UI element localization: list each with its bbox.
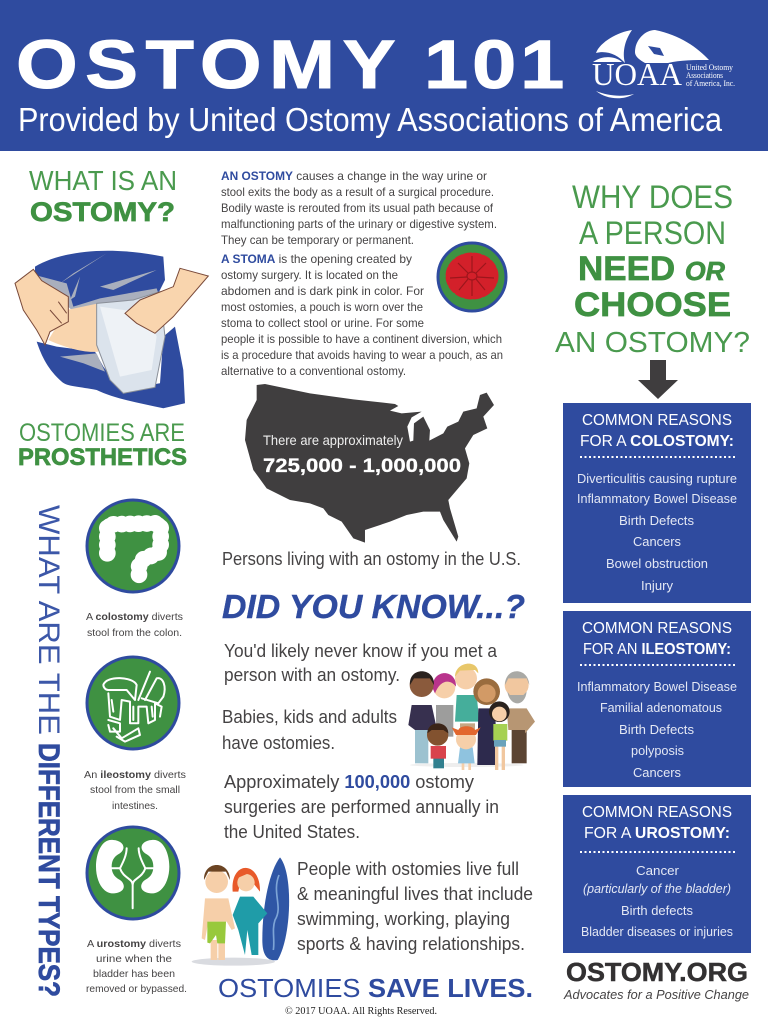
- text block: an ostomy: AN OSTOMY causes a change in the way urine or: [221, 169, 487, 183]
- title: OSTOMY: [16, 26, 395, 103]
- fact: never know: You'd likely never know if you met a: [224, 641, 498, 661]
- logo: UOAA: Associations: [686, 71, 723, 80]
- fact: 100,000 surgeries: [224, 772, 499, 842]
- heading: what is an ostomy: OSTOMY?: [30, 197, 175, 227]
- logo: UOAA: [592, 30, 735, 98]
- panel list: polyposis: [631, 743, 684, 758]
- panel heading: FOR A UROSTOMY:: [584, 825, 730, 842]
- panel list: Bladder diseases or injuries: [581, 924, 733, 939]
- text block: a stoma: ostomy surgery. It is located on the: [221, 268, 398, 282]
- caption: colostomy: [86, 611, 183, 639]
- text block: an ostomy: They can be temporary or permanent.: [221, 233, 414, 247]
- blond man: [455, 664, 479, 733]
- panel list: Birth defects: [621, 903, 693, 918]
- fact: babies kids adults: have ostomies.: [222, 733, 335, 753]
- map text: [263, 432, 461, 477]
- fact: full meaningful lives: People with ostomies live full: [297, 859, 519, 879]
- caption: urostomy: A urostomy diverts: [87, 938, 181, 950]
- panel heading: [580, 412, 734, 450]
- fact: never know: [224, 641, 498, 685]
- panel: ileostomy reasons: [563, 611, 751, 787]
- heading: why does a person need or choose an ostomy: A PERSON: [579, 215, 726, 251]
- fact: 100,000 surgeries: Approximately 100,000 ostomy: [224, 772, 474, 792]
- text block: a stoma: alternative to a conventional ostomy.: [221, 364, 406, 378]
- fact: 100,000 surgeries: the United States.: [224, 822, 360, 842]
- fact: full meaningful lives: [297, 859, 533, 954]
- icon: kidneys: [87, 827, 179, 919]
- subtitle: Provided by United Ostomy Associations of America: [18, 101, 723, 138]
- caption: colostomy: A colostomy diverts: [86, 611, 183, 623]
- icon: stoma: [438, 243, 506, 311]
- woman in hijab: [473, 678, 500, 765]
- heading: did you know: DID YOU KNOW...?: [222, 588, 525, 625]
- panel list: Inflammatory Bowel Disease: [577, 679, 737, 694]
- heading: what is an ostomy: [29, 165, 177, 227]
- arrow: [638, 360, 678, 399]
- man: [202, 865, 235, 960]
- panel: colostomy reasons: [563, 403, 751, 603]
- header banner: [0, 0, 768, 151]
- fact: babies kids adults: [222, 707, 397, 753]
- vertical heading: what are the different types: [32, 505, 65, 997]
- fact: full meaningful lives: sports & having relationships.: [297, 934, 525, 954]
- map: United States: [245, 384, 494, 543]
- panel heading: FOR A COLOSTOMY:: [580, 433, 734, 450]
- fact: full meaningful lives: swimming, working, playing: [297, 909, 510, 929]
- panel list: Cancers: [633, 765, 681, 780]
- illustration: diverse family group: [408, 664, 535, 770]
- girl: [489, 701, 510, 770]
- illustration: couple with surfboard: [192, 857, 289, 966]
- panel list: Diverticulitis causing rupture: [577, 471, 737, 486]
- fact: 100,000 surgeries: surgeries are performed annually in: [224, 797, 499, 817]
- caption: ileostomy: intestines.: [112, 800, 158, 812]
- text block: a stoma: is a procedure that avoids having to wear a pouch, as an: [221, 348, 503, 362]
- panel list: (particularly of the bladder): [583, 881, 731, 896]
- panel list: [577, 679, 737, 780]
- panel heading: [582, 804, 732, 842]
- caption: colostomy: stool from the colon.: [87, 627, 182, 639]
- old man: [505, 671, 535, 763]
- icon: small intestine: [87, 657, 179, 749]
- text block: an ostomy: [221, 169, 497, 247]
- panel list: Birth Defects: [619, 722, 694, 737]
- caption: ileostomy: An ileostomy diverts: [84, 769, 186, 781]
- text block: a stoma: stoma to collect stool or urine. For some: [221, 316, 424, 330]
- tagline: ostomies save lives: OSTOMIES SAVE LIVES.: [218, 973, 533, 1003]
- text block: a stoma: abdomen and is dark pink in color. For: [221, 284, 424, 298]
- caption: urostomy: urine when the: [96, 953, 172, 965]
- logo: UOAA: of America, Inc.: [686, 79, 735, 88]
- panel list: [581, 863, 733, 939]
- brand: ostomy.org: OSTOMY.ORG: [566, 957, 748, 987]
- caption: urostomy: removed or bypassed.: [86, 983, 187, 995]
- title: 101: [424, 26, 564, 103]
- panel heading: COMMON REASONS: [582, 412, 732, 429]
- panel list: Bowel obstruction: [606, 556, 708, 571]
- brand: ostomy.org: Advocates for a Positive Change: [563, 987, 749, 1002]
- logo: UOAA: United Ostomy: [686, 63, 733, 72]
- text block: a stoma: most ostomies, a pouch is worn over the: [221, 300, 423, 314]
- text block: a stoma: [221, 252, 503, 378]
- panel heading: [582, 620, 732, 658]
- map text: There are approximately: [263, 432, 403, 448]
- text block: a stoma: people it is possible to have a continent diversion, which: [221, 332, 502, 346]
- red haired girl: [452, 726, 481, 770]
- logo: UOAA: UOAA: [592, 56, 682, 92]
- icon: colon: [87, 500, 179, 592]
- panel list: Familial adenomatous: [600, 700, 722, 715]
- vertical heading: what are the different types: WHAT ARE THE: [32, 505, 65, 735]
- fact: never know: person with an ostomy.: [224, 665, 400, 685]
- brand: ostomy.org: [563, 957, 749, 1002]
- pink hair woman: [433, 673, 456, 737]
- map text: 725,000 - 1,000,000: [263, 456, 461, 477]
- fact: babies kids adults: Babies, kids and adults: [222, 707, 397, 727]
- panel heading: COMMON REASONS: [582, 804, 732, 821]
- caption: ileostomy: [84, 769, 186, 812]
- heading: ostomies are prosthetics: OSTOMIES ARE: [19, 419, 185, 447]
- panel list: Injury: [641, 578, 673, 593]
- text block: an ostomy: Bodily waste is rerouted from its usual path because of: [221, 201, 494, 215]
- woman: [232, 868, 267, 955]
- text block: an ostomy: malfunctioning parts of the urinary or digestive system.: [221, 217, 497, 231]
- text block: a stoma: A STOMA is the opening created by: [221, 252, 412, 266]
- heading: ostomies are prosthetics: [18, 419, 187, 471]
- illustration: hands lifting shirt to show pouch: [15, 251, 208, 408]
- copyright: © 2017 UOAA. All Rights Reserved.: [285, 1006, 437, 1017]
- heading: why does a person need or choose an ostomy: CHOOSE: [574, 286, 731, 324]
- caption: urostomy: bladder has been: [93, 968, 175, 980]
- surfboard: [262, 857, 289, 960]
- panel heading: FOR AN ILEOSTOMY:: [583, 641, 731, 658]
- boy: [427, 723, 448, 768]
- caption: urostomy: [86, 938, 187, 995]
- panel list: Birth Defects: [619, 513, 694, 528]
- fact: full meaningful lives: & meaningful lives that include: [297, 884, 533, 904]
- heading: why does a person need or choose an ostomy: AN OSTOMY?: [555, 327, 750, 359]
- title: [16, 26, 564, 103]
- panel list: [577, 471, 737, 593]
- caption: ileostomy: stool from the small: [90, 784, 180, 796]
- panel heading: COMMON REASONS: [582, 620, 732, 637]
- panel: urostomy reasons: [563, 795, 751, 953]
- map caption: Persons living with an ostomy in the U.S.: [222, 549, 521, 569]
- heading: why does a person need or choose an ostomy: [555, 179, 750, 359]
- panel list: Cancer: [636, 863, 680, 878]
- heading: why does a person need or choose an ostomy: NEED OR: [578, 250, 725, 288]
- panel list: Inflammatory Bowel Disease: [577, 491, 737, 506]
- text block: an ostomy: stool exits the body as a result of a surgical procedure.: [221, 185, 494, 199]
- heading: what is an ostomy: WHAT IS AN: [29, 165, 177, 196]
- panel list: Cancers: [633, 534, 681, 549]
- heading: ostomies are prosthetics: PROSTHETICS: [18, 444, 187, 471]
- heading: why does a person need or choose an ostomy: WHY DOES: [572, 179, 733, 215]
- man with dark skin: [408, 671, 436, 763]
